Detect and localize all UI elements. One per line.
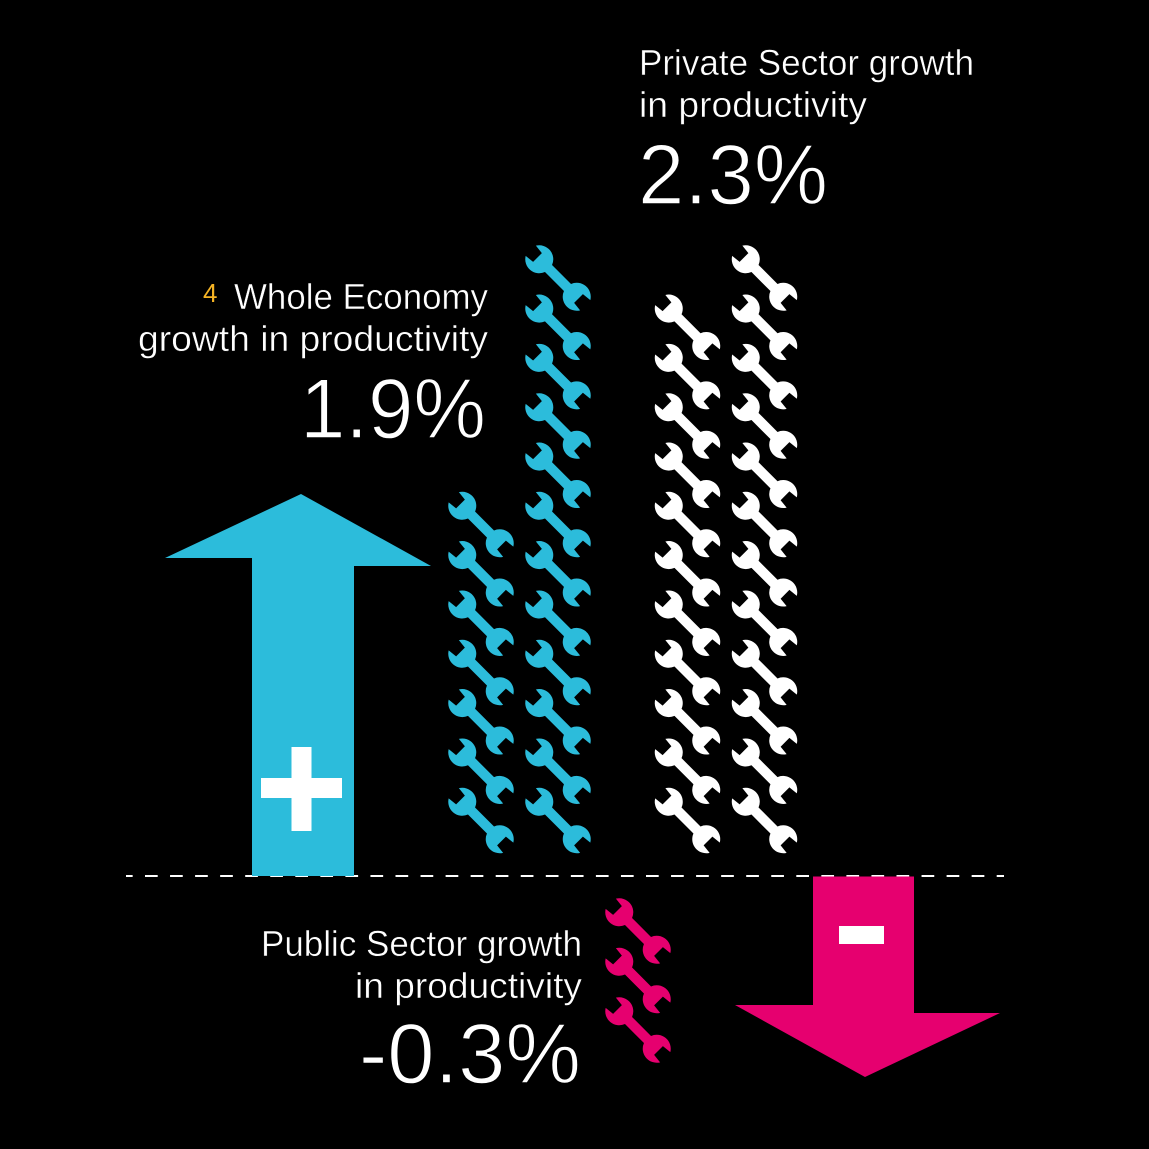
value: 1.9%: 1.9%	[300, 362, 486, 457]
arrow: magenta down arrow with minus	[735, 876, 1000, 1077]
wrench column: whole economy, tall	[521, 241, 595, 858]
text block: private sector	[638, 42, 974, 223]
arrow: cyan up arrow with plus	[165, 494, 431, 876]
icon: minus sign	[839, 926, 884, 944]
text block: public sector: Public Sector growth	[261, 923, 582, 964]
text block: whole economy: growth in productivity	[138, 318, 488, 359]
dashed baseline	[126, 875, 1004, 877]
text block: private sector: Private Sector growth	[639, 42, 974, 83]
text block: whole economy: Whole Economy	[234, 276, 488, 317]
text block: whole economy	[138, 276, 488, 457]
wrench column: whole economy, short	[444, 487, 518, 858]
text block: public sector	[261, 923, 582, 1102]
value: 2.3%: 2.3%	[638, 128, 828, 223]
wrench column: public sector	[601, 894, 675, 1067]
text block: private sector: in productivity	[639, 84, 867, 125]
wrench column: private sector, short	[650, 290, 725, 858]
text block: whole economy: 4	[203, 278, 217, 308]
value: -0.3%: -0.3%	[359, 1007, 581, 1102]
icon: plus sign	[261, 747, 342, 831]
text block: public sector: in productivity	[355, 965, 582, 1006]
wrench column: private sector, tall	[727, 241, 802, 858]
